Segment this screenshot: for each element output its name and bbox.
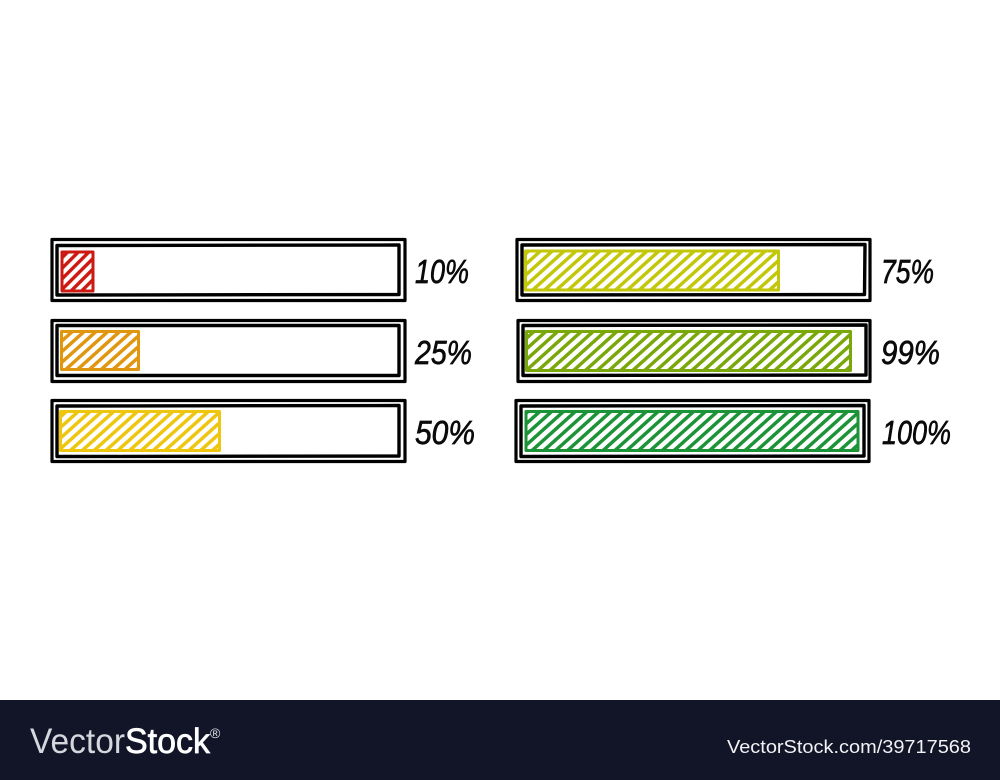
fill: yellow 50% <box>60 412 220 450</box>
progress bar: 10% <box>52 240 469 300</box>
progress bar: 25% <box>52 320 472 382</box>
fill: red 10% <box>62 252 93 291</box>
fill: lime 75% <box>526 251 778 290</box>
label: 50%: 50% <box>415 414 475 451</box>
fill: green 100% <box>526 412 858 450</box>
progress bar: 99% <box>518 320 940 382</box>
label: 75%: 75% <box>881 253 934 290</box>
fill: olive green 99% <box>526 332 850 370</box>
footer band <box>0 700 1000 780</box>
footer logo: Stock: Stock <box>125 722 210 761</box>
label: 25%: 25% <box>414 334 472 371</box>
label: 10%: 10% <box>415 253 469 290</box>
progress bar: 75% <box>517 240 934 300</box>
fill: orange 25% <box>62 332 138 370</box>
label: 100%: 100% <box>882 414 951 451</box>
footer logo: VectorStock: Vector <box>30 722 125 761</box>
footer url: VectorStock.com/39717568 <box>727 737 971 757</box>
progress bar: 50% <box>52 400 475 462</box>
footer logo: registered mark: ® <box>210 725 221 741</box>
progress bar: 100% <box>516 400 951 462</box>
label: 99%: 99% <box>881 334 940 371</box>
